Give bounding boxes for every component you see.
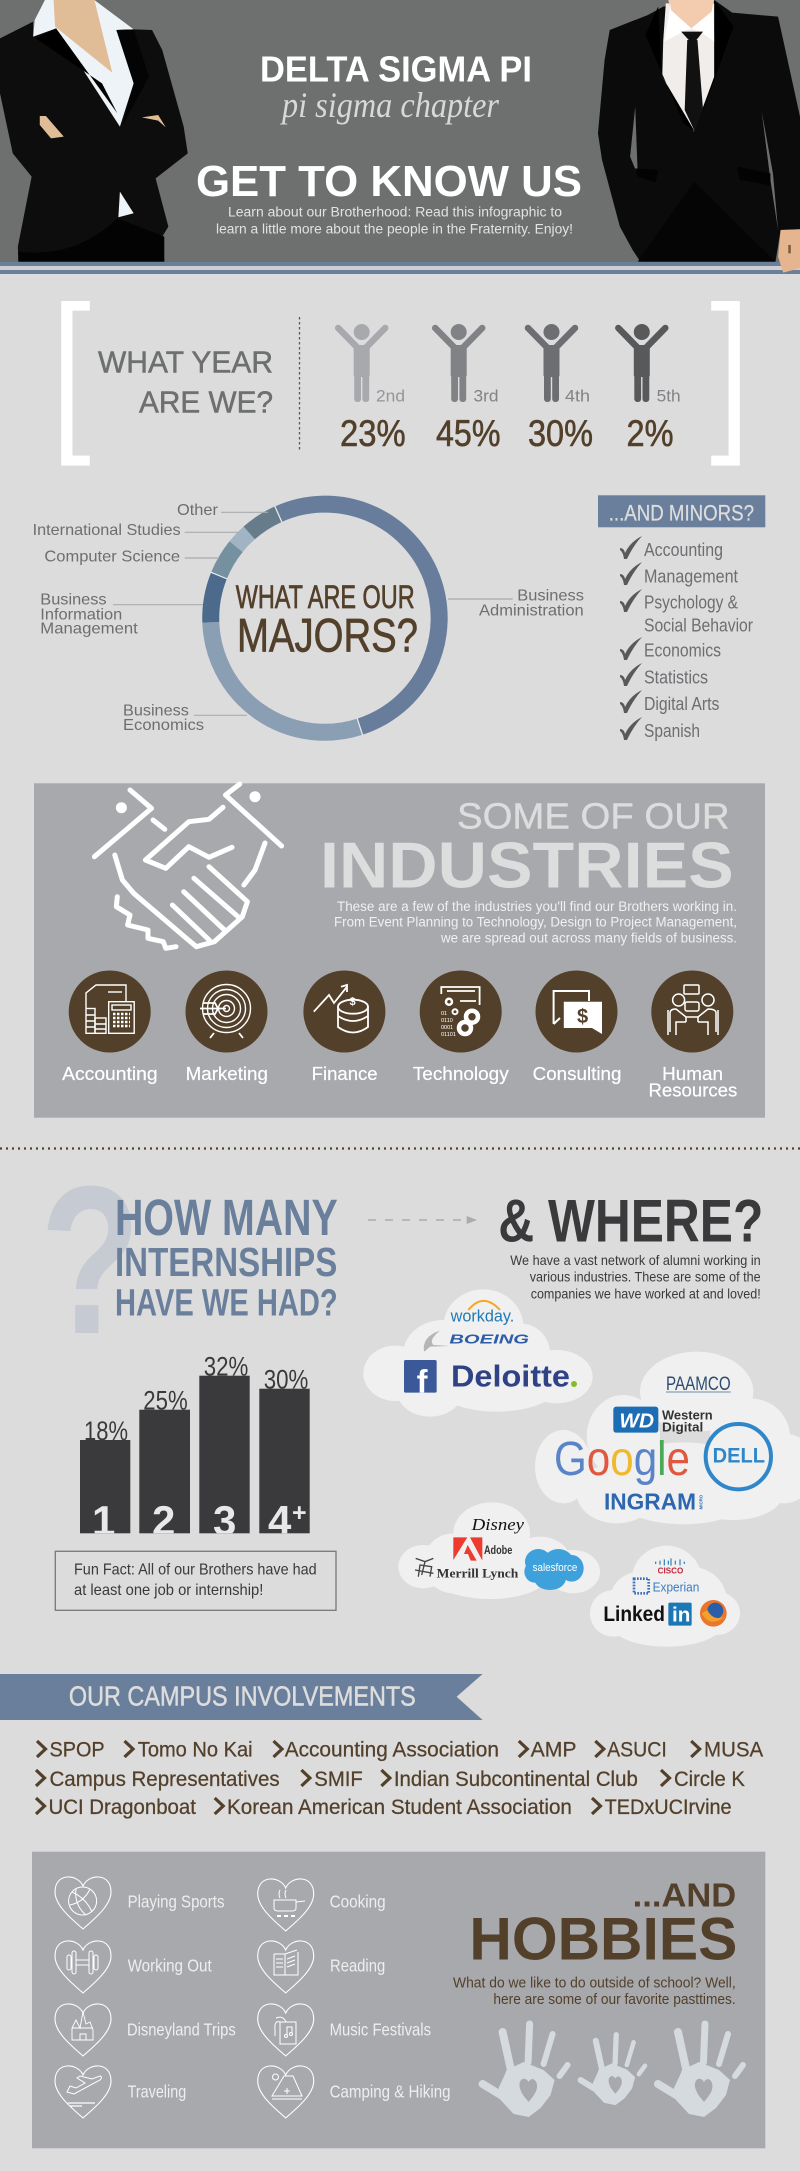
bar chart (80, 1352, 310, 1544)
4th year (528, 324, 593, 454)
2nd year: 2nd (376, 387, 405, 406)
donut title: MAJORS? (237, 609, 418, 662)
involvement list: AMP (531, 1739, 576, 1762)
icon: marketing (186, 970, 268, 1052)
heading: ARE WE? (139, 385, 273, 420)
heading (320, 795, 734, 901)
minors checklist: Management (644, 565, 738, 586)
minors heading: ...AND MINORS? (609, 501, 754, 526)
hobby: playing sports (55, 1877, 225, 1929)
cloud: workday boeing facebook deloitte: workday. (450, 1307, 514, 1326)
3rd year: 3rd (474, 387, 498, 406)
bar chart: 30% (264, 1365, 308, 1395)
hobby: music festivals: Music Festivals (330, 2020, 431, 2040)
icon: technology: 01101 (441, 1032, 456, 1038)
icon: question mark: ? (40, 1143, 141, 1379)
bar chart: 18% (84, 1416, 128, 1446)
major labels: Information (40, 606, 122, 623)
major labels: Management (40, 621, 138, 638)
bar chart: 25% (143, 1386, 188, 1416)
header stripes (0, 262, 800, 274)
heading: INDUSTRIES (320, 828, 734, 901)
industry labels: Accounting (62, 1063, 158, 1084)
hobby: cooking: Cooking (330, 1892, 386, 1912)
involvement list: Circle K (674, 1768, 745, 1791)
cloud: cisco experian linkedin firefox: in (672, 1604, 690, 1627)
involvement list: SMIF (314, 1768, 363, 1791)
minors checklist: Digital Arts (644, 693, 719, 714)
5th year (618, 324, 681, 454)
bar chart: 3 (213, 1497, 236, 1544)
minors heading (598, 495, 765, 527)
description: From Event Planning to Technology, Design to Project Management, (334, 915, 737, 930)
icon: handshake (94, 784, 282, 948)
cloud: disney adobe merrill lynch salesforce: Merrill Lynch (437, 1567, 518, 1581)
minors checklist: Economics (644, 640, 721, 661)
industry labels (62, 1063, 737, 1101)
cloud: cisco experian linkedin firefox: Experian (653, 1581, 699, 1595)
description: we are spread out across many fields of business. (440, 931, 737, 946)
header banner (0, 0, 800, 262)
headline: GET TO KNOW US (196, 158, 582, 206)
fun fact callout (55, 1551, 336, 1610)
involvement list: SPOP (50, 1739, 105, 1762)
involvement list: Campus Representatives (50, 1768, 280, 1791)
description: These are a few of the industries you'll find our Brothers working in. (337, 899, 737, 914)
involvement list: UCI Dragonboat (48, 1796, 196, 1819)
cloud: paamco western digital google dell ingram: INGRAM (604, 1488, 696, 1514)
heading: SOME OF OUR (457, 795, 730, 836)
cloud: disney adobe merrill lynch salesforce: salesforce (533, 1562, 577, 1574)
icon: finance: $ (350, 996, 356, 1008)
chevrons (36, 1741, 700, 1814)
industry labels: Finance (312, 1063, 378, 1084)
icon: human resources (651, 970, 733, 1052)
panel: internships (48, 1186, 337, 1611)
involvement list: ASUCI (607, 1739, 667, 1762)
cloud: disney adobe merrill lynch salesforce: Adobe (484, 1543, 513, 1557)
cloud: cisco experian linkedin firefox: CISCO (658, 1566, 683, 1575)
2nd year: 23% (340, 413, 406, 454)
cloud: workday boeing facebook deloitte: BOEING (449, 1332, 529, 1346)
donut title (236, 579, 418, 662)
major labels: International Studies (33, 522, 181, 539)
minors checklist: Psychology & (644, 592, 739, 613)
bar chart: 2 (152, 1497, 175, 1544)
involvement list: Indian Subcontinental Club (394, 1768, 638, 1791)
major labels: Economics (123, 717, 204, 734)
heading (98, 345, 273, 420)
intro text: Learn about our Brotherhood: Read this infographic to (228, 205, 562, 220)
hobbies heading: ...AND (633, 1878, 736, 1915)
cloud: workday boeing facebook deloitte: f (417, 1363, 428, 1400)
panel: company clouds (363, 1289, 800, 1647)
2nd year (338, 324, 406, 454)
handprints (483, 2024, 743, 2117)
3rd year (435, 324, 500, 454)
industry labels: Resources (648, 1080, 737, 1101)
bar chart: 32% (204, 1352, 248, 1382)
ribbon heading: OUR CAMPUS INVOLVEMENTS (69, 1681, 416, 1712)
hobby: music festivals (258, 2004, 431, 2056)
hobby: reading: Reading (330, 1956, 385, 1976)
major labels: Administration (479, 602, 584, 619)
icon: accounting (69, 970, 151, 1052)
involvement list: TEDxUCIrvine (605, 1796, 732, 1819)
cloud: paamco western digital google dell ingram: Google (554, 1432, 690, 1486)
cloud: cisco experian linkedin firefox: Linked (603, 1602, 665, 1626)
4th year: 30% (528, 413, 593, 454)
heading: WHAT YEAR (98, 345, 273, 380)
hobbies description: What do we like to do outside of school? Well, (453, 1976, 736, 1992)
involvement list: Accounting Association (285, 1739, 499, 1762)
cloud: paamco western digital google dell ingram: Western (662, 1407, 713, 1422)
major labels: Business (123, 702, 189, 719)
cloud: paamco western digital google dell ingram: PAAMCO (666, 1374, 731, 1395)
cloud: workday boeing facebook deloitte: Deloitte (451, 1360, 570, 1394)
panel: majors donut chart (33, 502, 584, 735)
hobby: playing sports: Playing Sports (128, 1892, 225, 1912)
hobby: working out (55, 1941, 212, 1993)
major labels: Business (517, 587, 584, 604)
panel: industries (34, 783, 765, 1118)
bar chart: 1 (92, 1497, 115, 1544)
icon: finance (303, 970, 385, 1052)
leader lines (113, 512, 513, 715)
minors checklist: Spanish (644, 720, 700, 741)
cloud: paamco western digital google dell ingram: MICRO (698, 1494, 703, 1509)
hobbies description: here are some of our favorite pasttimes. (493, 1992, 736, 2008)
intro text: learn a little more about the people in the Fraternity. Enjoy! (216, 222, 573, 236)
minors checklist (620, 536, 753, 741)
hobby: reading (258, 1941, 385, 1993)
icon: technology: 0110 (441, 1018, 453, 1024)
minors checklist: Statistics (644, 666, 708, 687)
hobbies heading (469, 1878, 737, 1972)
heading (115, 1189, 338, 1325)
cloud: paamco western digital google dell ingram (535, 1352, 800, 1524)
icon: technology (420, 970, 502, 1052)
icon: consulting: $ (577, 1006, 588, 1028)
heading: HOW MANY (115, 1189, 338, 1246)
hobby: working out: Working Out (128, 1956, 212, 1976)
where description: companies we have worked at and loved! (531, 1285, 761, 1301)
hobby: disneyland trips: Disneyland Trips (127, 2020, 236, 2040)
bar chart: + (292, 1499, 307, 1527)
hobbies description (453, 1976, 736, 2008)
cloud: disney adobe merrill lynch salesforce: Disney (471, 1515, 525, 1534)
3rd year: 45% (436, 413, 500, 454)
subtitle: pi sigma chapter (279, 85, 500, 125)
header hand foreground (778, 229, 800, 273)
industry labels: Consulting (533, 1063, 621, 1084)
involvement list: Korean American Student Association (227, 1796, 572, 1819)
title: DELTA SIGMA PI (260, 49, 532, 90)
where description: We have a vast network of alumni working in (510, 1252, 761, 1268)
hobbies heading: HOBBIES (469, 1905, 737, 1972)
description (334, 899, 737, 946)
cloud: paamco western digital google dell ingram: WD (619, 1409, 654, 1432)
hobby: camping and hiking: Camping & Hiking (330, 2081, 450, 2101)
panel: campus involvements (0, 1674, 763, 1819)
major labels: Business (40, 591, 107, 608)
industry labels: Technology (413, 1063, 509, 1084)
major labels: Other (177, 502, 219, 519)
involvement list: MUSA (704, 1739, 763, 1762)
illustration: businessman (598, 0, 800, 262)
heading: HAVE WE HAD? (115, 1283, 338, 1325)
left bracket (61, 301, 90, 466)
major labels: Computer Science (44, 549, 180, 566)
icon: technology: 0001 (441, 1025, 453, 1031)
hobby: traveling: Traveling (128, 2081, 186, 2101)
involvement list: Tomo No Kai (138, 1739, 253, 1762)
arrow (368, 1216, 477, 1224)
ribbon heading (0, 1674, 483, 1720)
cloud: cisco experian linkedin firefox (590, 1546, 740, 1647)
minors checklist: Accounting (644, 539, 723, 560)
right bracket (711, 301, 740, 466)
cloud: paamco western digital google dell ingram: Digital (662, 1419, 703, 1434)
cloud: workday boeing facebook deloitte (363, 1289, 593, 1417)
donut title: WHAT ARE OUR (236, 579, 415, 615)
hobby: camping and hiking (258, 2066, 450, 2118)
hobby: cooking (258, 1879, 386, 1931)
fun fact callout: at least one job or internship! (74, 1582, 263, 1599)
hobby: disneyland trips (55, 2004, 236, 2056)
involvement list (48, 1739, 763, 1819)
donut ring (211, 504, 439, 735)
panel: minors (598, 495, 765, 741)
where description: various industries. These are some of the (530, 1269, 761, 1285)
heading: INTERNSHIPS (115, 1239, 337, 1285)
illustration: businesswoman (0, 0, 188, 262)
bar chart: 4 (268, 1497, 292, 1544)
minors checklist: Social Behavior (644, 614, 753, 635)
hobby: traveling (55, 2066, 186, 2118)
5th year: 5th (657, 387, 681, 406)
cloud: disney adobe merrill lynch salesforce (398, 1502, 600, 1599)
5th year: 2% (626, 413, 674, 454)
cloud: paamco western digital google dell ingram: DELL (713, 1444, 765, 1468)
panel: hobbies (32, 1852, 765, 2148)
major labels (33, 502, 584, 734)
icon: consulting (536, 970, 618, 1052)
4th year: 4th (565, 387, 590, 406)
industry labels: Marketing (186, 1063, 268, 1084)
industry labels: Human (662, 1063, 723, 1084)
intro text (216, 205, 573, 236)
fun fact callout: Fun Fact: All of our Brothers have had (74, 1561, 317, 1578)
icon: technology: 01 (441, 1011, 447, 1017)
panel: what year are we (61, 301, 740, 466)
where description (510, 1252, 761, 1301)
